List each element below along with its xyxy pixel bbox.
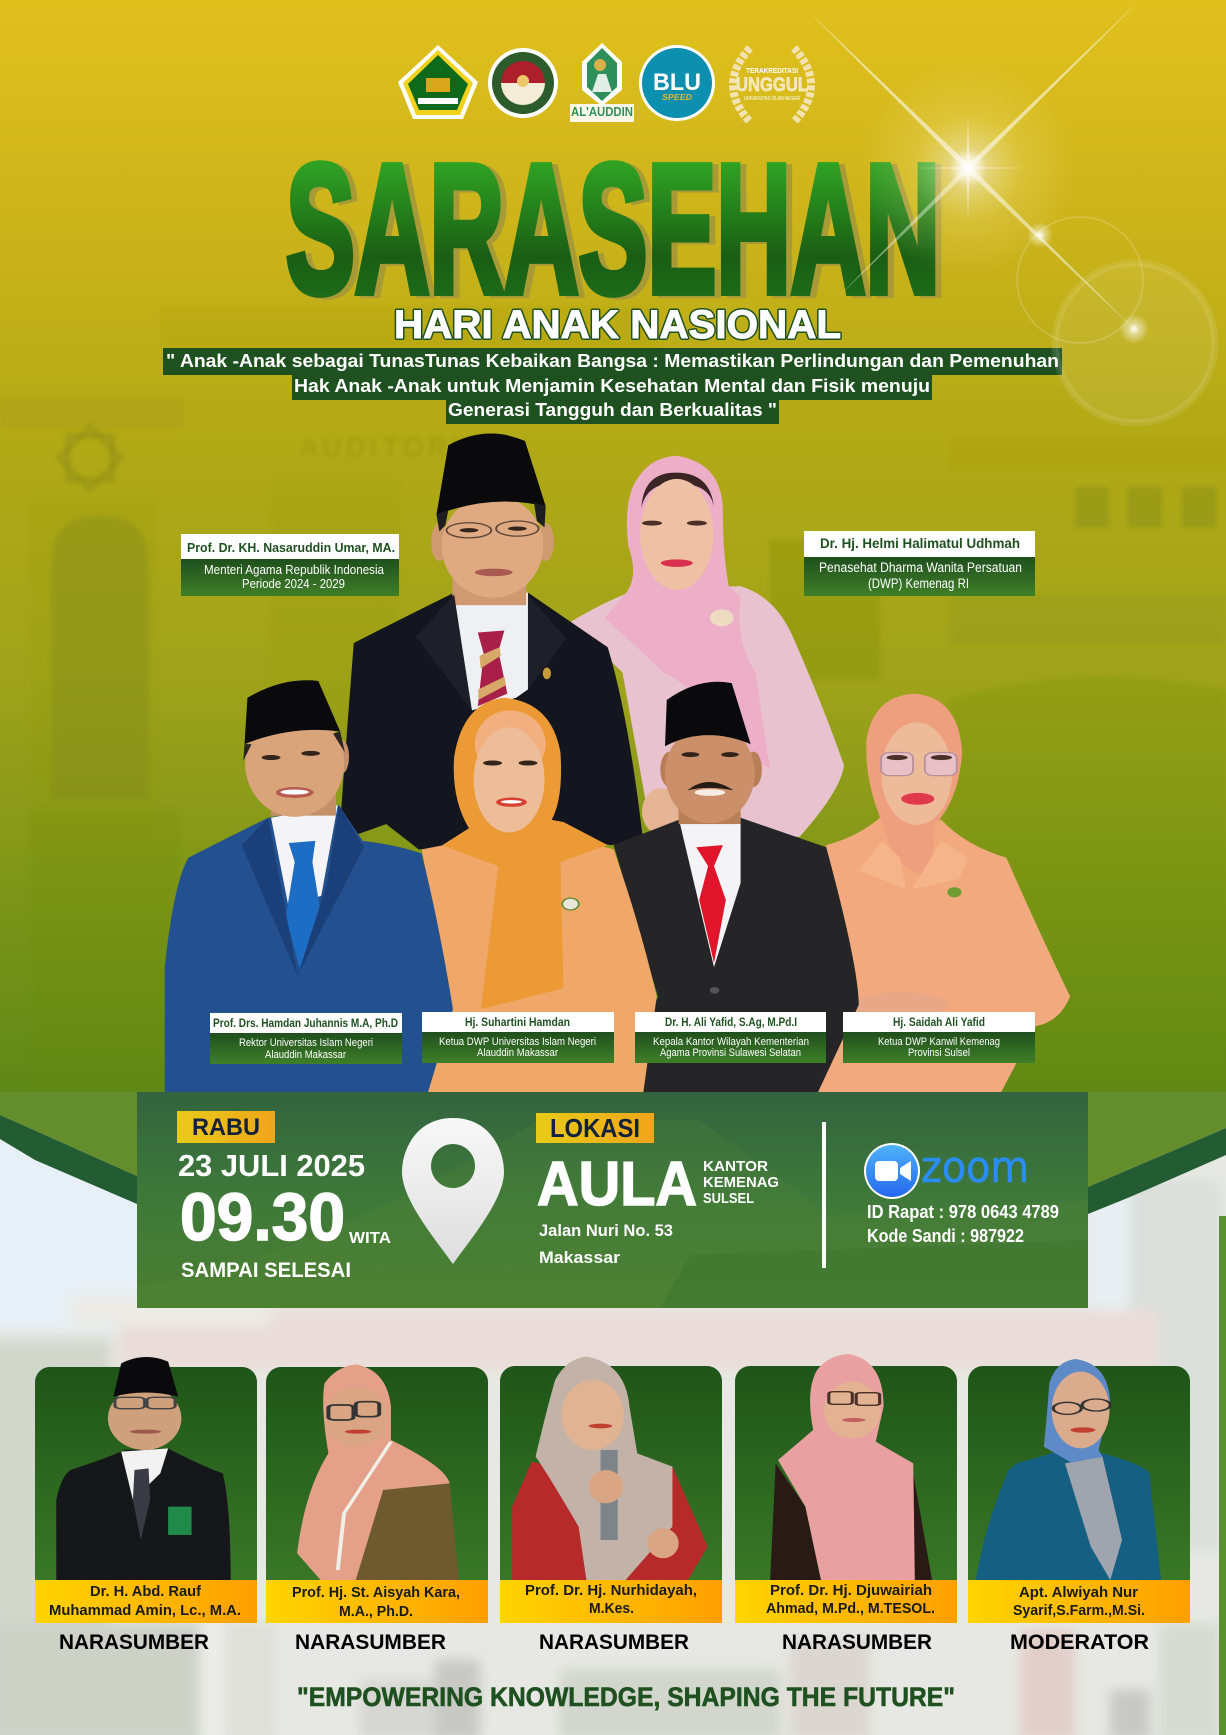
name label: Nasaruddin Umar: Periode 2024 - 2029: [242, 576, 345, 591]
card: Nurhidayah: [500, 1357, 722, 1623]
title: SARASEHAN: [286, 126, 946, 333]
name label: Saidah Ali Yafid: Provinsi Sulsel: [908, 1047, 970, 1059]
background: faded auditorium building: [0, 306, 1226, 1092]
zoom block: [864, 1142, 1059, 1246]
name label: Saidah Ali Yafid: Ketua DWP Kanwil Kemenag: [878, 1036, 1000, 1048]
logo: Terakreditasi Unggul: TERAKREDITASI: [746, 68, 798, 75]
card: Djuwairiah Ahmad: [735, 1354, 957, 1623]
location block: SULSEL: [703, 1190, 754, 1207]
role labels: MODERATOR: [1010, 1631, 1149, 1654]
name label: Nasaruddin Umar: [181, 534, 399, 596]
logo: BLU Speed: [639, 45, 715, 121]
name label: Ali Yafid: Dr. H. Ali Yafid, S.Ag, M.Pd.I: [665, 1017, 797, 1029]
name label: Suhartini Hamdan: Ketua DWP Universitas Islam Negeri: [439, 1036, 596, 1048]
name label: Helmi Halimatul Udhmah: (DWP) Kemenag RI: [868, 576, 969, 591]
zoom block: Kode Sandi : 987922: [867, 1226, 1024, 1246]
person: Hamdan Juhannis: [165, 680, 453, 1093]
theme text block: " Anak -Anak sebagai TunasTunas Kebaikan Bangsa : Memastikan Perlindungan dan Pemenuhan: [166, 351, 1059, 371]
name label: Suhartini Hamdan: Hj. Suhartini Hamdan: [465, 1017, 570, 1029]
zoom block: zoom: [921, 1142, 1029, 1193]
name label: Hamdan Juhannis: Alauddin Makassar: [265, 1049, 346, 1061]
location block: KANTOR: [703, 1158, 768, 1175]
panel: event details: [137, 1092, 1088, 1308]
background: lower campus photo: [0, 1092, 1226, 1735]
person: Suhartini Hamdan: [422, 698, 657, 1093]
person: Saidah Ali Yafid: [817, 694, 1070, 1093]
background: faded auditorium building: AUDITORIUM: [300, 432, 510, 462]
date and time block: [177, 1111, 391, 1282]
card: Djuwairiah Ahmad: Prof. Dr. Hj. Djuwairiah: [770, 1582, 932, 1599]
date and time block: 23 JULI 2025: [178, 1148, 365, 1183]
panel: speaker cards: [35, 1354, 1190, 1623]
role labels: NARASUMBER: [295, 1631, 446, 1654]
location block: Jalan Nuri No. 53: [539, 1221, 673, 1240]
logo: BLU Speed: BLU: [653, 69, 701, 96]
card: Aisyah Kara: Prof. Hj. St. Aisyah Kara,: [292, 1584, 460, 1601]
card: Nurhidayah: M.Kes.: [589, 1600, 634, 1617]
name label: Helmi Halimatul Udhmah: Dr. Hj. Helmi Halimatul Udhmah: [820, 536, 1020, 551]
card: Alwiyah Nur: Syarif,S.Farm.,M.Si.: [1013, 1602, 1145, 1619]
card: Nurhidayah: Prof. Dr. Hj. Nurhidayah,: [525, 1582, 697, 1599]
role labels: NARASUMBER: [539, 1631, 689, 1654]
logo row: [398, 43, 811, 122]
location block: KEMENAG: [703, 1174, 779, 1191]
date and time block: SAMPAI SELESAI: [181, 1259, 351, 1282]
lens flare: [807, 0, 1215, 423]
location block: AULA: [537, 1150, 697, 1219]
name label: Nasaruddin Umar: Menteri Agama Republik Indonesia: [204, 562, 385, 577]
theme text block: [163, 348, 1062, 424]
background: yellow to green gradient: [0, 0, 1226, 1092]
role labels: NARASUMBER: [782, 1631, 932, 1654]
person: Nasaruddin Umar: [339, 434, 643, 849]
logo: Terakreditasi Unggul: [733, 48, 811, 122]
name label: Hamdan Juhannis: Prof. Drs. Hamdan Juhannis M.A, Ph.D: [213, 1018, 398, 1030]
location block: [536, 1113, 779, 1267]
date and time block: RABU: [192, 1114, 260, 1141]
card: Aisyah Kara: [266, 1364, 488, 1623]
name label: Saidah Ali Yafid: [843, 1012, 1035, 1063]
role labels: [59, 1631, 1149, 1654]
date and time block: 09.30: [180, 1180, 345, 1255]
theme text block: Hak Anak -Anak untuk Menjamin Kesehatan Mental dan Fisik menuju: [294, 376, 930, 396]
subtitle: Hari Anak Nasional: HARI ANAK NASIONAL: [394, 303, 841, 347]
name label: Saidah Ali Yafid: Hj. Saidah Ali Yafid: [893, 1017, 985, 1029]
card: Alwiyah Nur: [968, 1359, 1190, 1623]
name label: Hamdan Juhannis: Rektor Universitas Islam Negeri: [239, 1037, 373, 1049]
logo: Kementerian Agama: [398, 45, 478, 119]
icon: location pin: [402, 1118, 504, 1264]
name label: Suhartini Hamdan: Alauddin Makassar: [477, 1047, 558, 1059]
name label: Ali Yafid: Agama Provinsi Sulawesi Selatan: [660, 1047, 801, 1059]
name label: Hamdan Juhannis: [210, 1013, 402, 1064]
name label: Ali Yafid: Kepala Kantor Wilayah Kementerian: [653, 1036, 809, 1048]
logo: UIN Alauddin Makassar: [570, 43, 634, 122]
background: green banner: [0, 1092, 1226, 1735]
logo: BLU Speed: SPEED: [662, 93, 692, 102]
name label: Ali Yafid: [635, 1012, 826, 1063]
card: Abd. Rauf: [35, 1357, 257, 1623]
tagline: "EMPOWERING KNOWLEDGE, SHAPING THE FUTURE": [297, 1682, 955, 1712]
name label: Helmi Halimatul Udhmah: Penasehat Dharma Wanita Persatuan: [819, 560, 1022, 575]
theme text block: Generasi Tangguh dan Berkualitas ": [448, 400, 777, 420]
card: Abd. Rauf: Muhammad Amin, Lc., M.A.: [49, 1602, 241, 1619]
name label: Helmi Halimatul Udhmah: [804, 531, 1035, 596]
name label: Suhartini Hamdan: [422, 1012, 614, 1063]
zoom block: ID Rapat : 978 0643 4789: [867, 1202, 1059, 1222]
logo: Terakreditasi Unggul: UNGGUL: [736, 75, 808, 96]
name label: Nasaruddin Umar: Prof. Dr. KH. Nasaruddin Umar, MA.: [187, 540, 395, 555]
guests group photo: [165, 434, 1070, 1093]
person: Helmi Halimatul Udhmah: [571, 456, 844, 837]
card: Alwiyah Nur: Apt. Alwiyah Nur: [1019, 1584, 1138, 1601]
logo: UIN Alauddin Makassar: AL'AUDDIN: [571, 104, 633, 119]
person: Ali Yafid: [614, 682, 859, 1093]
logo: Dharma Wanita: [488, 48, 558, 118]
date and time block: WITA: [349, 1230, 391, 1247]
logo: Terakreditasi Unggul: UNIVERSITAS ISLAM NEGERI: [744, 96, 800, 102]
card: Aisyah Kara: M.A., Ph.D.: [339, 1603, 413, 1620]
card: Abd. Rauf: Dr. H. Abd. Rauf: [90, 1583, 202, 1600]
role labels: NARASUMBER: [59, 1631, 209, 1654]
card: Djuwairiah Ahmad: Ahmad, M.Pd., M.TESOL.: [766, 1600, 935, 1617]
location block: Makassar: [539, 1248, 620, 1267]
subtitle: Hari Anak Nasional: HARI ANAK NASIONAL: [394, 303, 841, 347]
location block: LOKASI: [550, 1113, 640, 1143]
